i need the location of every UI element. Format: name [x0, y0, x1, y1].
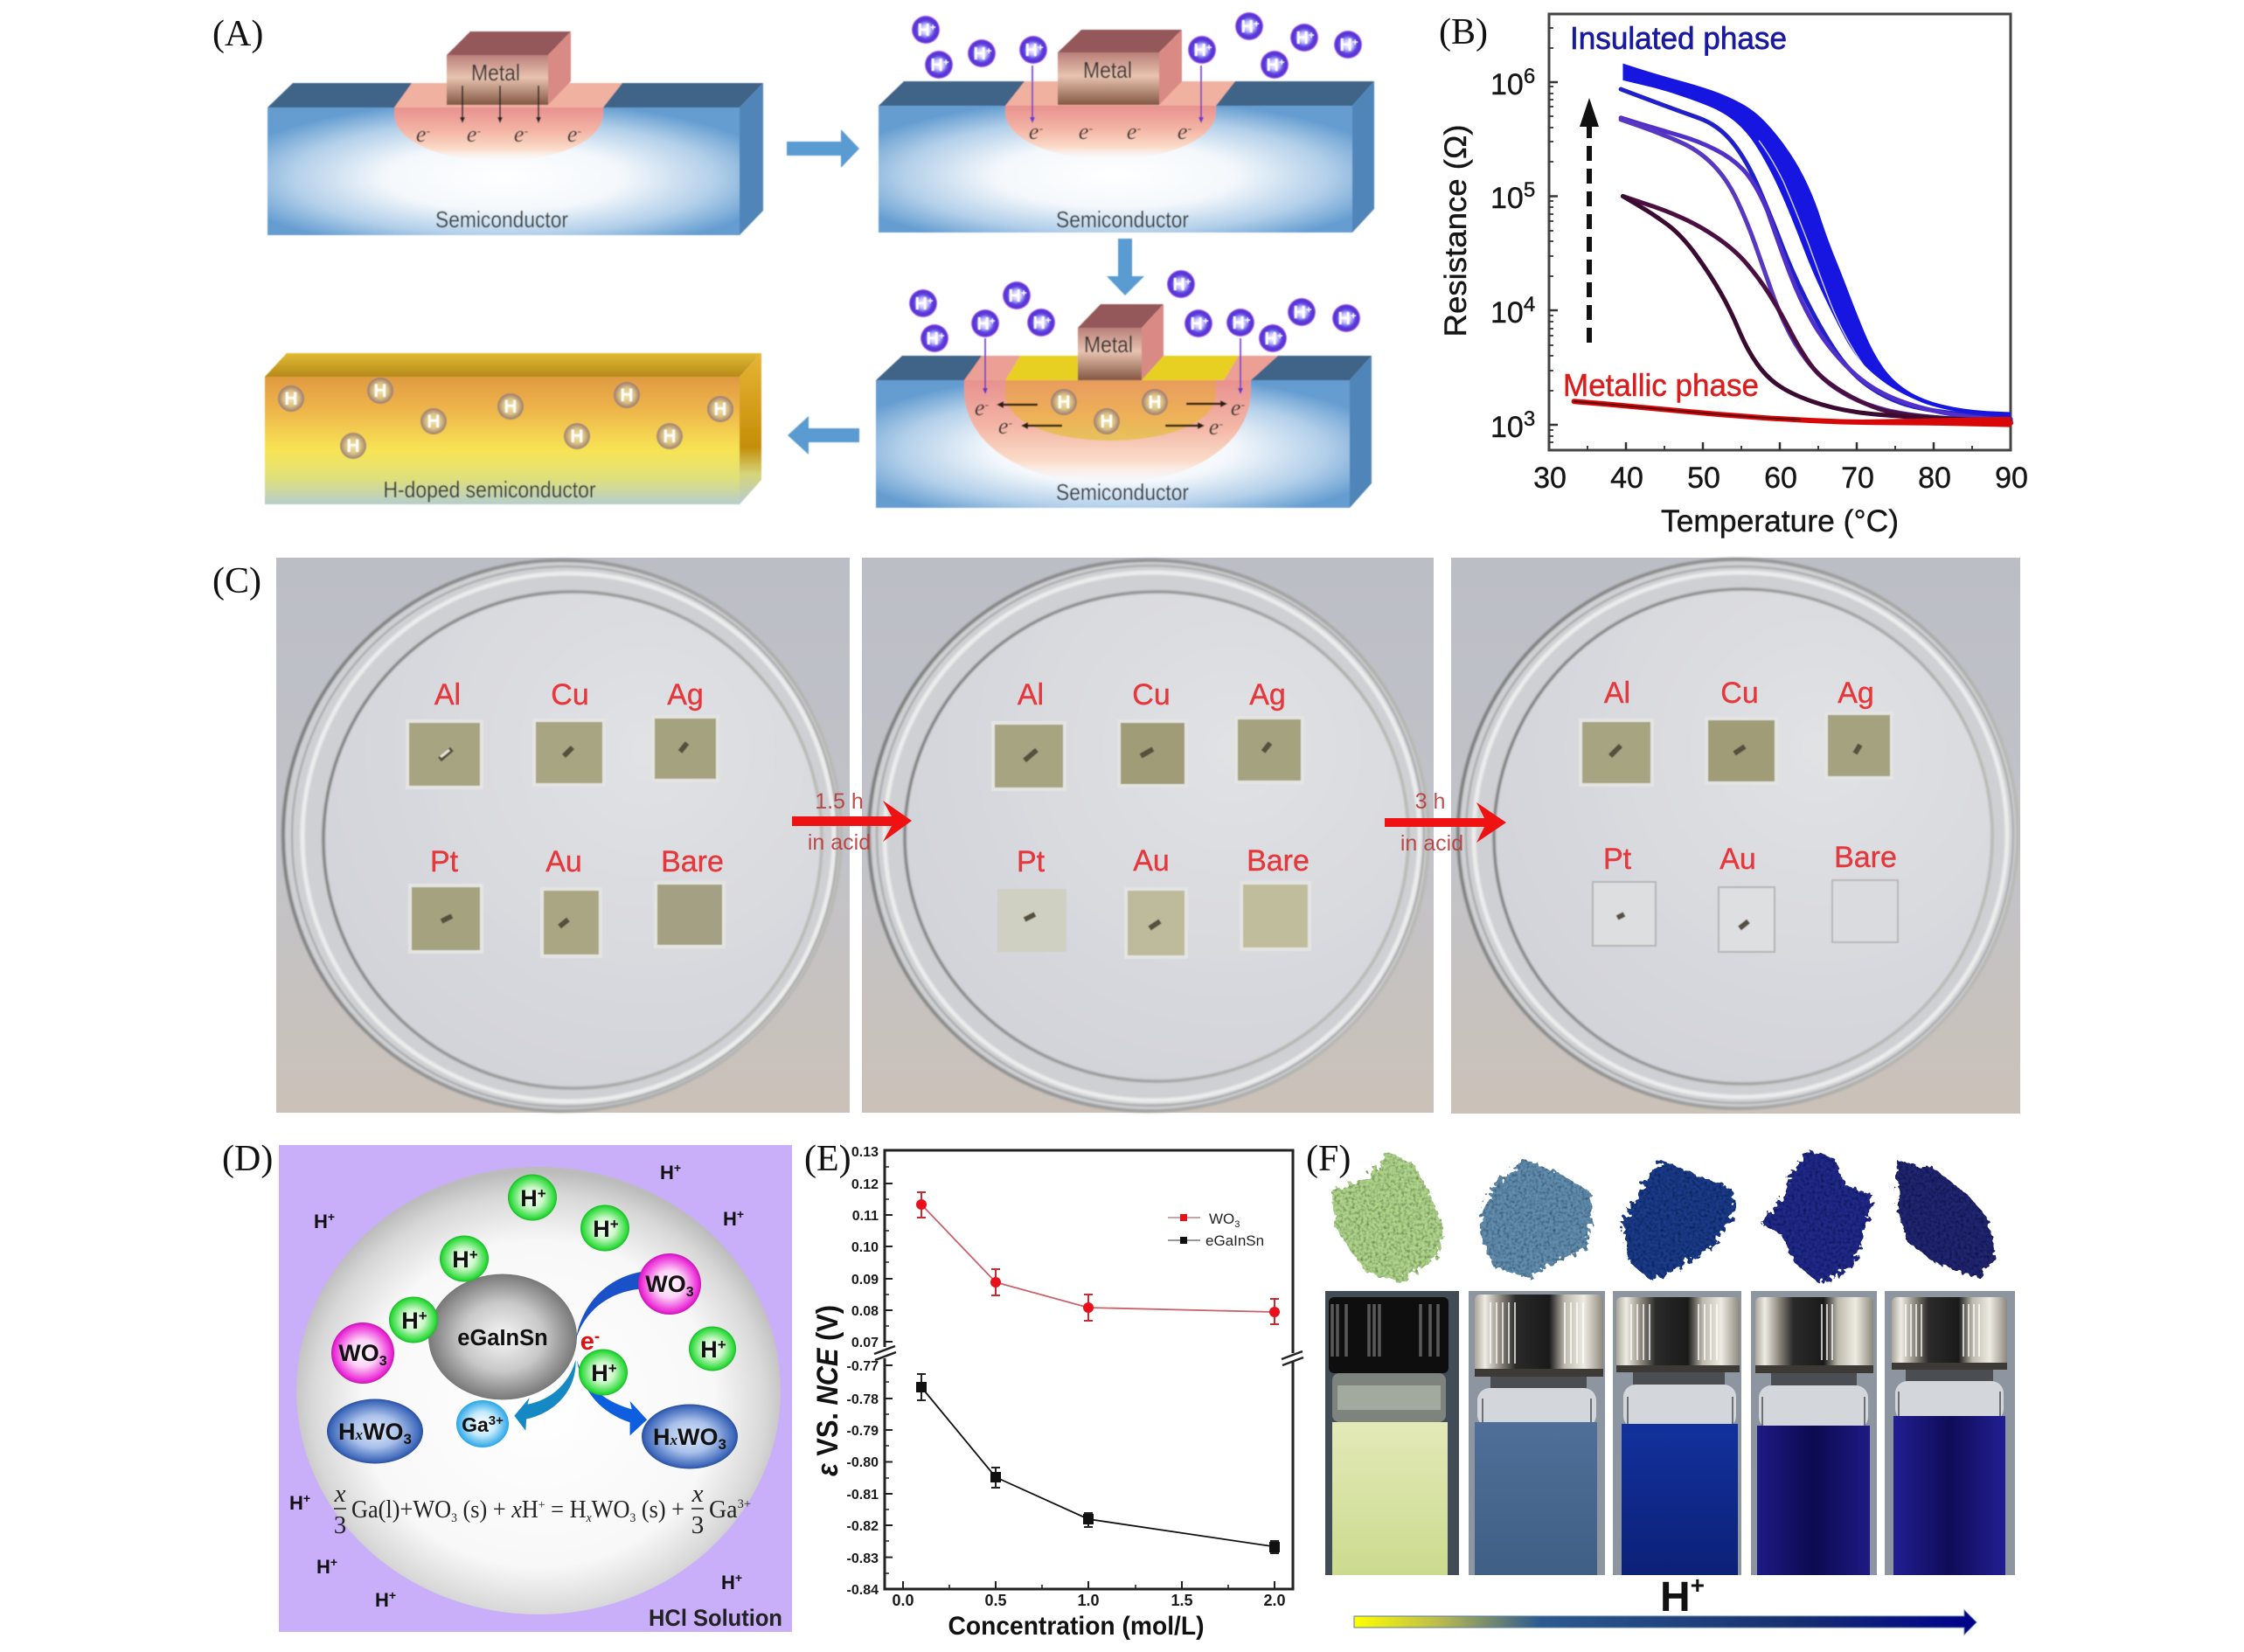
y tick labels: 10 — [1490, 68, 1524, 101]
curves — [1574, 64, 2011, 427]
purple solution background — [279, 1145, 792, 1632]
step 1: metal on semiconductor: e — [416, 121, 426, 147]
green H+ ions: H — [593, 1216, 610, 1242]
step 4: H-doped semiconductor: H-doped semiconductor — [383, 476, 596, 503]
green H+ ions: + — [538, 1185, 546, 1202]
step 3: electron transfer: - — [1008, 417, 1012, 430]
H+ ions above step 3: + — [1021, 288, 1026, 299]
step 3: electron transfer: H — [1057, 392, 1071, 413]
step 2: H+ attack: - — [1088, 122, 1093, 135]
step 2: H+ attack: e — [1178, 119, 1187, 144]
H+ ions above step 3: + — [1277, 331, 1282, 342]
sample chips — [1579, 711, 1898, 952]
chip labels: Pt — [430, 845, 459, 878]
H+ ions above step 3: + — [939, 331, 944, 342]
legend — [1168, 1211, 1264, 1249]
dashed arrow — [1580, 98, 1599, 343]
step 3: electron transfer: - — [1240, 399, 1245, 412]
y tick labels: 4 — [1524, 293, 1535, 316]
reaction equation: 3 — [451, 1511, 457, 1525]
free H+ labels: H — [289, 1492, 303, 1514]
step 3: electron transfer: e — [1231, 395, 1240, 420]
step 1: metal on semiconductor: - — [426, 125, 430, 138]
powder samples — [1331, 1151, 1996, 1284]
H+ ions above step 3: H — [1173, 275, 1185, 295]
WO3 series — [916, 1192, 1280, 1324]
H+ ions above step 2: H — [1194, 41, 1206, 60]
H+ ions above step 3: H — [977, 315, 990, 334]
arrow: step 2 to 3 — [1107, 239, 1144, 295]
sample chips — [406, 715, 726, 958]
green H+ ions: + — [608, 1360, 617, 1377]
green H+ ions — [389, 1175, 736, 1395]
chip labels: Au — [1719, 843, 1756, 876]
H+ ions above step 2: + — [943, 58, 948, 68]
H+ ions above step 3: H — [1294, 303, 1306, 323]
H+ ions above step 3: + — [1185, 277, 1191, 288]
chip labels: Al — [434, 678, 461, 711]
green H+ ions: + — [718, 1336, 726, 1353]
step 2: H+ attack: Semiconductor — [1056, 206, 1189, 233]
x tick labels: 90 — [1995, 462, 2028, 495]
axis ticks — [1549, 82, 1934, 450]
step 4: H-doped semiconductor: H — [427, 412, 441, 432]
step 2: H+ attack: Metal — [1083, 57, 1132, 83]
y tick labels: -0.80 — [847, 1455, 879, 1470]
y tick labels — [1490, 65, 1535, 444]
HCl solution label: HCl Solution — [649, 1605, 782, 1631]
H+ ions above step 3: H — [1265, 330, 1277, 349]
H+ ions above step 3: + — [1306, 305, 1311, 316]
free H+ labels: + — [330, 1555, 337, 1569]
y tick labels: 5 — [1524, 178, 1535, 202]
H+ ions above step 3: + — [1245, 316, 1250, 326]
panel E: potential vs concentration chart: ε VS. NCE (V) — [811, 1305, 844, 1476]
x tick labels: 40 — [1610, 462, 1643, 495]
H+ ions above step 3: H — [1033, 314, 1046, 333]
step 4: H-doped semiconductor: H — [284, 389, 298, 409]
H+ ions above step 3: H — [915, 295, 927, 314]
reaction equation: x — [334, 1480, 346, 1508]
electron flow arrows — [514, 1272, 647, 1435]
HxWO3 particles — [327, 1399, 738, 1468]
x tick labels: 60 — [1764, 462, 1797, 495]
free H+ labels: + — [303, 1491, 310, 1505]
chip labels — [430, 678, 724, 878]
green H+ ions: H — [520, 1185, 538, 1211]
chip labels — [1603, 677, 1897, 876]
chip labels: Ag — [667, 678, 704, 711]
HxWO3 particles: HxWO — [338, 1419, 404, 1445]
panel C: photo 2 after 1.5 h — [862, 558, 1434, 1113]
chip labels: Pt — [1017, 845, 1046, 878]
step 2: H+ attack: e — [1127, 119, 1136, 144]
HxWO3 particles: 3 — [719, 1436, 726, 1453]
Ga3+ ion: 3+ — [489, 1413, 504, 1428]
step 1: metal on semiconductor: Semiconductor — [435, 206, 568, 233]
vial 4 — [1751, 1291, 1877, 1575]
free H+ labels: + — [674, 1161, 681, 1175]
step 3: electron transfer: e — [998, 413, 1008, 439]
H+ ions above step 2: H — [1267, 56, 1279, 75]
x tick labels: 2.0 — [1263, 1592, 1286, 1609]
x tick labels: 70 — [1841, 462, 1874, 495]
reaction equation: x — [586, 1511, 592, 1525]
free H+ labels: H — [316, 1556, 330, 1578]
free H+ labels: + — [737, 1207, 744, 1221]
step 1: metal on semiconductor — [267, 31, 763, 235]
panel label F: (F) — [1306, 1139, 1351, 1179]
y tick labels: -0.83 — [847, 1551, 879, 1566]
plot frame — [885, 1150, 1293, 1589]
arrow: 1.5 h in acid: in acid — [808, 830, 871, 855]
eGaInSn core — [428, 1274, 577, 1400]
H+ ions above step 2: + — [930, 23, 935, 33]
step 1: metal on semiconductor: e — [567, 121, 577, 147]
H+ ions above step 2: + — [986, 46, 991, 57]
x tick labels — [1533, 462, 2028, 495]
legend: eGaInSn — [1205, 1232, 1264, 1249]
panel label B: (B) — [1439, 12, 1488, 52]
y tick labels: 0.10 — [851, 1240, 879, 1255]
y tick labels: -0.78 — [847, 1392, 879, 1407]
step 3: electron transfer: Metal — [1084, 331, 1133, 357]
y tick labels: 6 — [1524, 65, 1535, 88]
free H+ labels: H — [721, 1572, 735, 1593]
y tick labels: 0.08 — [851, 1304, 879, 1319]
step 1: metal on semiconductor: e — [514, 121, 524, 147]
H+ label: H — [1660, 1574, 1691, 1621]
arrow: 3 h in acid: 3 h — [1415, 789, 1445, 814]
H+ ions above step 3: H — [1191, 315, 1203, 334]
panel F: powders and vials — [1325, 1151, 2015, 1635]
step 3: electron transfer: Semiconductor — [1056, 479, 1189, 505]
plot frame — [1549, 14, 2011, 450]
H+ ions above step 2: + — [1309, 31, 1314, 41]
step 4: H-doped semiconductor: H — [620, 385, 634, 406]
H+ ions above step 2: + — [1206, 43, 1212, 53]
Ga3+ ion: Ga — [462, 1413, 489, 1436]
free H+ labels: H — [660, 1162, 674, 1183]
reaction equation: (s) + — [636, 1496, 684, 1524]
y tick labels: -0.77 — [847, 1359, 879, 1374]
step 3: electron transfer: H — [1100, 412, 1114, 432]
step 2: H+ attack: - — [1136, 122, 1141, 135]
H+ ions above step 2: H — [931, 56, 943, 75]
H+ ions above step 2: + — [1279, 58, 1284, 68]
step 4: H-doped semiconductor: H — [373, 381, 387, 401]
H+ ions above step 3: H — [1338, 309, 1351, 329]
panel label A: (A) — [212, 14, 263, 54]
panel label C: (C) — [212, 561, 261, 601]
x tick labels: 50 — [1687, 462, 1720, 495]
eGaInSn core: eGaInSn — [457, 1326, 548, 1350]
H+ ions above step 2: + — [1254, 19, 1259, 30]
droplet sphere — [296, 1167, 781, 1614]
step 4: H-doped semiconductor — [265, 353, 761, 504]
step 3: electron transfer — [876, 304, 1372, 508]
step 4: H-doped semiconductor: H — [504, 397, 518, 417]
reaction equation: = H — [545, 1496, 587, 1524]
free H+ labels: + — [389, 1588, 396, 1602]
chip labels: Al — [1604, 677, 1630, 710]
step 2: H+ attack — [879, 30, 1374, 233]
legend: 3 — [1234, 1219, 1240, 1230]
chip labels: Ag — [1249, 678, 1286, 711]
step 1: metal on semiconductor: - — [476, 125, 481, 138]
y tick labels: -0.84 — [847, 1583, 879, 1598]
panel B: resistance vs temperature chart — [1439, 14, 2028, 538]
step 3: electron transfer: H — [1148, 392, 1162, 413]
arrow: step 3 to 4 — [788, 416, 859, 455]
chip labels: Cu — [1132, 678, 1171, 711]
panel A: hydrogen doping schematic — [265, 12, 1374, 508]
chip labels: Au — [1133, 844, 1170, 878]
step 3: electron transfer: - — [984, 399, 989, 412]
vial 1 — [1325, 1291, 1459, 1575]
step 1: metal on semiconductor: Metal — [471, 59, 520, 86]
step 3: electron transfer: e — [975, 395, 984, 420]
reaction equation: xH — [511, 1496, 540, 1524]
Ga3+ ion — [456, 1400, 509, 1447]
H+ ions above step 2: H — [918, 21, 930, 40]
WO3 particles: WO — [338, 1340, 379, 1366]
chip labels: Al — [1018, 678, 1044, 711]
step 2: H+ attack: - — [1039, 122, 1043, 135]
WO3 particles — [331, 1253, 701, 1384]
arrow: 3 h in acid — [1385, 789, 1506, 856]
gradient arrow — [1354, 1610, 1977, 1635]
step 2: H+ attack: e — [1029, 119, 1039, 144]
insulated phase label: Insulated phase — [1570, 20, 1787, 56]
step 4: H-doped semiconductor: H — [346, 436, 360, 456]
arrow: 1.5 h in acid — [792, 789, 912, 855]
x tick labels: 80 — [1918, 462, 1951, 495]
H+ ions above step 2: H — [974, 45, 986, 64]
x tick labels: 0.0 — [892, 1592, 914, 1609]
panel label E: (E) — [804, 1139, 851, 1179]
reaction equation: x — [691, 1480, 704, 1508]
H+ ions above step 3: + — [1203, 316, 1208, 327]
HxWO3 particles: 3 — [404, 1431, 412, 1447]
WO3 particles: WO — [645, 1271, 686, 1297]
chip labels: Bare — [1247, 844, 1310, 878]
free H+ labels: H — [375, 1589, 389, 1611]
H+ ions above step 3: + — [1351, 311, 1356, 322]
H+ ions above step 3: H — [1009, 287, 1021, 306]
chip labels: Cu — [551, 678, 589, 711]
reaction equation: 3 — [629, 1511, 636, 1525]
H+ ions above step 3 — [909, 270, 1360, 352]
y tick labels: 0.09 — [851, 1273, 879, 1288]
metallic phase label: Metallic phase — [1563, 367, 1759, 403]
vial 3 — [1613, 1291, 1741, 1575]
H+ ions above step 2: + — [1352, 38, 1358, 48]
chip labels: Cu — [1720, 677, 1759, 710]
step 4: H-doped semiconductor: H — [570, 427, 584, 447]
y tick labels: 10 — [1490, 411, 1524, 444]
step 4: H-doped semiconductor: H — [663, 427, 677, 447]
step 1: metal on semiconductor: - — [577, 125, 581, 138]
reaction equation — [334, 1480, 751, 1539]
step 1: metal on semiconductor: - — [524, 125, 528, 138]
green H+ ions: + — [469, 1246, 478, 1263]
chip labels: Bare — [661, 845, 724, 878]
legend: WO — [1209, 1211, 1234, 1227]
green H+ ions: H — [401, 1308, 419, 1334]
y tick labels: -0.81 — [847, 1488, 879, 1503]
chip labels: Ag — [1838, 677, 1874, 710]
green H+ ions: H — [452, 1246, 469, 1273]
green H+ ions: + — [419, 1308, 427, 1324]
chip labels — [1017, 678, 1310, 878]
green H+ ions: + — [610, 1216, 619, 1232]
arrow: step 1 to 2 — [787, 129, 859, 168]
chip labels: Pt — [1603, 843, 1632, 876]
H+ ions above step 2: H — [1296, 29, 1309, 48]
y tick labels: 0.11 — [852, 1209, 879, 1224]
sample chips — [991, 716, 1311, 959]
y tick labels: 0.07 — [851, 1336, 879, 1350]
reaction equation: 3+ — [738, 1497, 751, 1511]
H+ ions above step 2: H — [1025, 41, 1038, 60]
y tick labels — [847, 1145, 879, 1598]
axis ticks — [885, 1183, 1275, 1589]
x tick labels — [892, 1592, 1286, 1609]
free H+ labels: H — [314, 1211, 328, 1232]
eGaInSn series — [916, 1374, 1280, 1553]
reaction equation: 3 — [691, 1511, 704, 1539]
x tick labels: 1.5 — [1171, 1592, 1193, 1609]
step 1: metal on semiconductor: e — [467, 121, 476, 147]
y tick labels: 0.13 — [851, 1145, 879, 1160]
x tick labels: 0.5 — [984, 1592, 1007, 1609]
H+ ions above step 3: H — [927, 330, 939, 349]
y tick labels: 10 — [1490, 296, 1524, 330]
HxWO3 particles: HxWO — [653, 1424, 719, 1450]
H+ ions above step 3: + — [927, 296, 933, 307]
H+ ions above step 3: + — [990, 316, 995, 327]
panel C: photo 1 initial dish — [276, 558, 850, 1113]
chip labels: Bare — [1834, 841, 1897, 874]
panel label D: (D) — [222, 1139, 273, 1179]
H+ ions above step 2 — [912, 12, 1362, 79]
arrow: 1.5 h in acid: 1.5 h — [815, 789, 864, 814]
vial 2 — [1469, 1291, 1605, 1575]
y tick labels: 10 — [1490, 182, 1524, 215]
vial 5 — [1885, 1291, 2015, 1575]
y tick labels: -0.79 — [847, 1424, 879, 1439]
WO3 particles: 3 — [686, 1285, 694, 1300]
reaction equation: + — [538, 1498, 545, 1512]
free H+ labels — [289, 1161, 744, 1611]
step 2: H+ attack: e — [1079, 119, 1088, 144]
H+ ions above step 3: H — [1233, 314, 1245, 333]
reaction equation: WO — [592, 1496, 629, 1524]
H+ ions above step 3: + — [1046, 316, 1051, 326]
y tick labels: 0.12 — [851, 1177, 879, 1192]
y tick labels: 3 — [1524, 407, 1535, 431]
free H+ labels: H — [723, 1208, 737, 1230]
H+ ions above step 2: H — [1241, 17, 1254, 37]
H+ ions above step 2: + — [1038, 43, 1043, 53]
green H+ ions: H — [700, 1336, 718, 1363]
reaction equation: 3 — [334, 1511, 346, 1539]
panel C: photo 3 after 3 h — [1451, 558, 2020, 1114]
green H+ ions: H — [591, 1360, 608, 1386]
H+ label: + — [1691, 1572, 1705, 1599]
axis titles: Concentration (mol/L) — [948, 1612, 1205, 1641]
WO3 particles: 3 — [379, 1354, 387, 1369]
panel D: reaction schematic — [279, 1145, 792, 1632]
step 3: electron transfer: e — [1209, 414, 1219, 440]
x tick labels: 1.0 — [1077, 1592, 1100, 1609]
step 2: H+ attack: - — [1187, 122, 1191, 135]
reaction equation: Ga — [709, 1496, 739, 1524]
axis titles: Resistance (Ω) — [1439, 125, 1473, 337]
x tick labels: 30 — [1533, 462, 1567, 495]
panel E: potential vs concentration chart — [811, 1145, 1303, 1641]
step 4: H-doped semiconductor: H — [713, 399, 727, 420]
electron label: - — [594, 1328, 600, 1346]
free H+ labels: + — [735, 1571, 742, 1585]
H+ ions above step 2: H — [1340, 36, 1352, 55]
free H+ labels: + — [328, 1210, 335, 1224]
y tick labels: -0.82 — [847, 1519, 879, 1534]
step 3: electron transfer: - — [1219, 418, 1223, 431]
arrow: 3 h in acid: in acid — [1400, 831, 1463, 856]
reaction equation: Ga(l)+WO — [351, 1496, 462, 1524]
panel B: resistance vs temperature chart: Temperature (°C) — [1661, 504, 1899, 538]
chip labels: Au — [545, 845, 582, 878]
reaction equation: (s) + — [457, 1496, 511, 1524]
electron label: e — [580, 1328, 594, 1356]
